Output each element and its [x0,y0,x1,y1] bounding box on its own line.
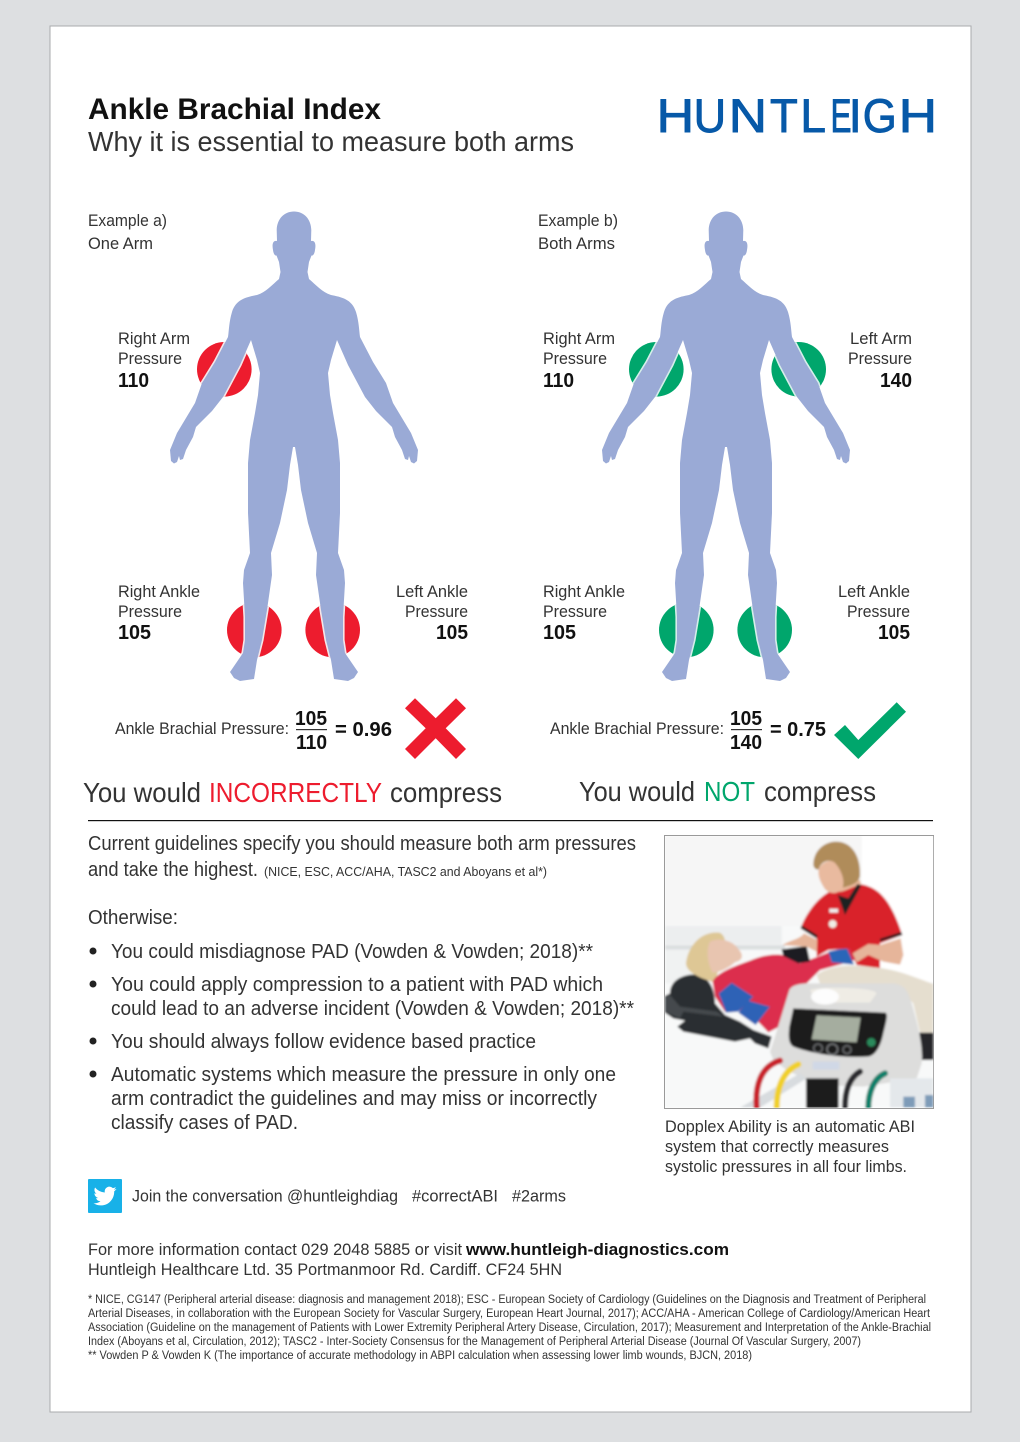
text block: guidelines: (NICE, ESC, ACC/AHA, TASC2 and Aboyans et al*) [264,865,547,879]
text block: otherwise bullet list [88,907,634,1134]
panel: example a, one arm [83,211,502,808]
label: right arm pressure [118,329,190,392]
label: left ankle pressure [396,582,468,644]
label: right ankle pressure: 105 [118,622,151,644]
verdict: not compress: You would [579,776,695,807]
image caption: Dopplex Ability is an automatic ABI [665,1117,915,1136]
label: left arm pressure: 140 [880,370,912,392]
formula: ankle brachial pressure 0.75: Ankle Brachial Pressure: [550,720,724,738]
formula: ankle brachial pressure 0.75: 140 [730,732,762,754]
logo: Huntleigh: T [770,89,798,142]
label: left ankle pressure: Pressure [847,602,910,621]
formula: ankle brachial pressure 0.96: Ankle Brachial Pressure: [115,720,289,738]
image caption: system that correctly measures [665,1137,889,1156]
logo: Huntleigh: L [800,89,826,142]
text block: guidelines: Current guidelines specify you should measure both arm pressures [88,833,636,855]
text block: otherwise bullet list: classify cases of PAD. [111,1112,298,1134]
verdict: not compress [579,776,876,807]
text block: otherwise bullet list: Automatic systems which measure the pressure in only one [111,1064,616,1086]
title block [88,93,574,157]
social line: Join the conversation @huntleighdiag [132,1186,398,1206]
references footnote: Association (Guideline on the management of Patients with Lower Extremity Peripheral Artery Disease, Circulation, 2017); Measurement and Interpretation of the Ankle-Brachial [88,1322,931,1334]
label: left arm pressure: Left Arm [850,329,912,348]
example b heading: Both Arms [538,234,615,253]
body figure with green pressure cuffs [602,212,850,681]
title block: Ankle Brachial Index [88,93,381,126]
contact information: Huntleigh Healthcare Ltd. 35 Portmanmoor Rd. Cardiff. CF24 5HN [88,1260,562,1279]
formula: ankle brachial pressure 0.75: = 0.75 [770,719,826,741]
contact information: For more information contact 029 2048 5885 or visit [88,1240,462,1259]
photo: nurse with patient and Dopplex Ability device [664,836,934,1108]
logo: Huntleigh: G [863,89,897,142]
text block: guidelines [88,833,636,881]
references footnote: ** Vowden P & Vowden K (The importance of accurate methodology in ABPI calculation when assessing lower limb wounds, BJCN, 2018) [88,1350,752,1362]
label: right ankle pressure: 105 [543,622,576,644]
logo: Huntleigh: I [849,89,862,142]
label: left arm pressure [848,329,912,392]
text block: otherwise bullet list: You could apply compression to a patient with PAD which [111,974,603,996]
text block: guidelines: and take the highest. [88,859,258,881]
verdict: incorrectly compress: INCORRECTLY [209,777,382,808]
label: right arm pressure: Pressure [543,349,607,368]
social line: #correctABI [412,1186,498,1206]
label: left ankle pressure: Left Ankle [396,582,468,601]
example b heading [538,211,618,253]
verdict: incorrectly compress: compress [390,777,502,808]
logo: Huntleigh: E [830,89,852,142]
text block: otherwise bullet list: You could misdiagnose PAD (Vowden & Vowden; 2018)** [111,941,593,963]
text block: otherwise bullet list: could lead to an adverse incident (Vowden & Vowden; 2018)** [111,998,634,1020]
label: left ankle pressure: 105 [878,622,910,644]
body figure with red pressure cuffs [170,212,418,681]
example a heading: One Arm [88,234,153,253]
formula: ankle brachial pressure 0.96 [115,708,392,754]
formula: ankle brachial pressure 0.75: 105 [730,708,762,730]
logo: Huntleigh: H [899,89,937,142]
social line: #2arms [512,1186,566,1206]
label: right arm pressure: 110 [543,370,574,392]
label: right ankle pressure [118,582,200,644]
logo: Huntleigh [657,89,937,142]
label: right ankle pressure: Right Ankle [543,582,625,601]
label: right arm pressure: Pressure [118,349,182,368]
formula: ankle brachial pressure 0.96: = 0.96 [335,719,392,741]
text block: otherwise bullet list: Otherwise: [88,907,178,929]
label: right ankle pressure: Right Ankle [118,582,200,601]
logo: Huntleigh: H [657,89,694,142]
example b heading: Example b) [538,211,618,230]
label: right arm pressure: Right Arm [118,329,190,348]
label: right arm pressure: Right Arm [543,329,615,348]
logo: Huntleigh: N [729,89,767,142]
references footnote [88,1294,931,1362]
verdict: not compress: NOT [704,776,755,807]
references footnote: * NICE, CG147 (Peripheral arterial disease: diagnosis and management 2018); ESC - European Society of Cardiology (Guidelines on the Diagnosis and Treatment of Peripheral [88,1294,926,1306]
text block: otherwise bullet list: arm contradict the guidelines and may miss or incorrectly [111,1088,597,1110]
icon: red cross [405,698,466,759]
verdict: incorrectly compress [83,777,502,808]
label: left ankle pressure: Pressure [405,602,468,621]
text block: otherwise bullet list: You should always follow evidence based practice [111,1031,536,1053]
label: right arm pressure: 110 [118,370,149,392]
image caption [665,1117,915,1176]
formula: ankle brachial pressure 0.75 [550,708,826,754]
panel: example b, both arms [538,211,912,807]
formula: ankle brachial pressure 0.96: 105 [295,708,327,730]
label: right ankle pressure: Pressure [118,602,182,621]
references footnote: Arterial Diseases, in collaboration with the European Society for Vascular Surgery, European Heart Journal, 2017); ACC/AHA - American College of Cardiology/American Heart [88,1308,931,1320]
icon: twitter [88,1179,122,1213]
title block: Why it is essential to measure both arms [88,126,574,157]
label: left ankle pressure: 105 [436,622,468,644]
formula: ankle brachial pressure 0.96: 110 [296,732,327,754]
verdict: incorrectly compress: You would [83,777,201,808]
references footnote: Index (Aboyans et al, Circulation, 2012); TASC2 - Inter-Society Consensus for the Management of Peripheral Arterial Disease (Journal Of Vascular Surgery, 2007) [88,1336,861,1348]
example a heading [88,211,167,253]
label: right ankle pressure: Pressure [543,602,607,621]
label: right arm pressure [543,329,615,392]
label: left ankle pressure: Left Ankle [838,582,910,601]
label: left ankle pressure [838,582,910,644]
example a heading: Example a) [88,211,167,230]
logo: Huntleigh: U [694,89,726,142]
icon: green tick [834,702,906,759]
verdict: not compress: compress [764,776,876,807]
social line [132,1186,566,1206]
image caption: systolic pressures in all four limbs. [665,1157,907,1176]
contact information: www.huntleigh-diagnostics.com [465,1240,729,1259]
label: right ankle pressure [543,582,625,644]
label: left arm pressure: Pressure [848,349,912,368]
contact information [88,1240,729,1279]
